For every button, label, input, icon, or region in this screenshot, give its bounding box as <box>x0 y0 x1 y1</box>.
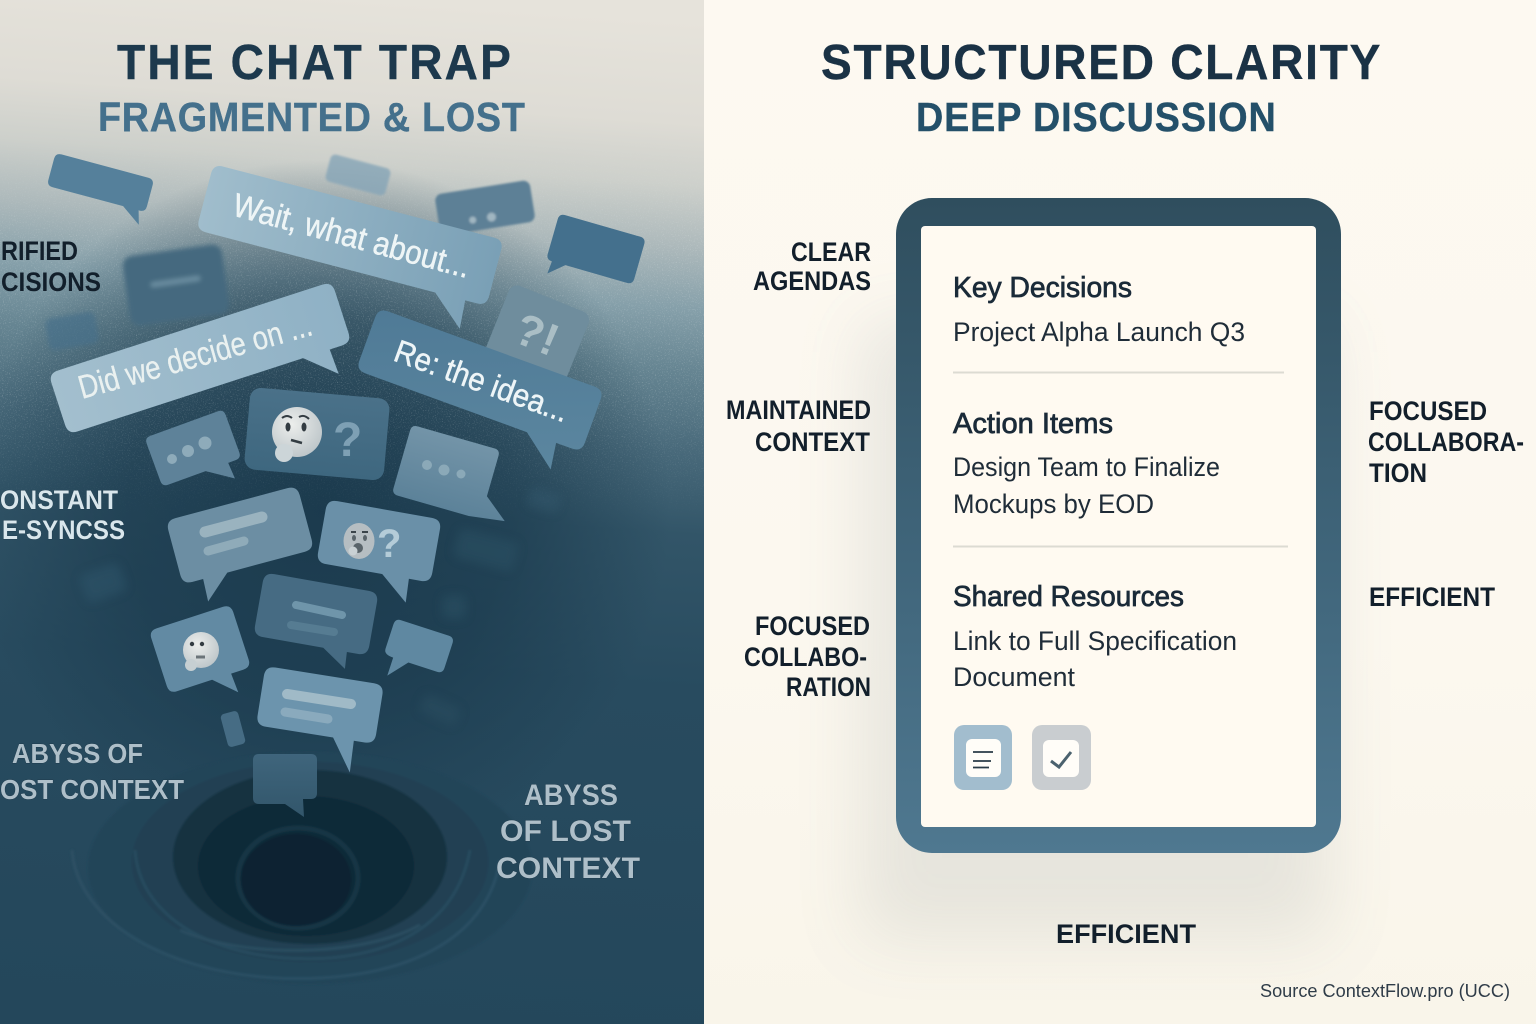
icon: checkmark <box>1032 725 1091 790</box>
section: key decisions <box>953 272 1245 347</box>
icon: document <box>954 725 1012 790</box>
section: action items: Design Team to Finalize <box>953 452 1220 482</box>
section: action items: Mockups by EOD <box>953 489 1154 519</box>
label: focused collaboration right: TION <box>1369 458 1427 488</box>
chat bubble: faint left <box>45 311 99 351</box>
icon: thinking face <box>272 407 322 462</box>
icon: worried face <box>183 632 219 671</box>
title: structured clarity: STRUCTURED CLARITY <box>821 36 1380 90</box>
label: focused collaboration left: FOCUSED <box>755 611 870 641</box>
title: the chat trap: THE CHAT TRAP <box>117 36 511 90</box>
section: action items <box>953 408 1220 519</box>
chat bubble: sinking into abyss <box>253 754 317 817</box>
chat bubble: typing dots right <box>392 425 523 526</box>
chat bubble: dark text lines <box>250 572 379 672</box>
label: abyss of lost context right <box>496 779 640 885</box>
illustration: abyss vortex <box>72 752 532 984</box>
subtitle: deep discussion: DEEP DISCUSSION <box>916 95 1276 140</box>
chat bubble: did we decide on: Did we decide on ... <box>74 306 316 406</box>
chat bubble: small right <box>378 618 454 692</box>
label: clear agendas <box>753 237 871 296</box>
icon: shocked face <box>344 523 374 559</box>
label: maintained context <box>726 395 871 457</box>
chat bubble: top right dots <box>434 180 536 236</box>
chat bubble: top small faded <box>324 153 392 197</box>
label: abyss of lost context right: ABYSS <box>524 779 618 812</box>
label: focused collaboration left: RATION <box>786 672 871 702</box>
chat bubble: shocked emoji <box>312 499 442 606</box>
chat bubble: wait, what about: Wait, what about... <box>229 186 474 285</box>
label: abyss of lost context right: OF LOST <box>500 815 631 848</box>
label: abyss of lost context left: ABYSS OF <box>12 738 143 769</box>
tablet document card <box>896 198 1341 853</box>
chat bubble: text lines bottom <box>251 666 384 776</box>
label: clarified decisions <box>1 236 101 297</box>
section: key decisions: Project Alpha Launch Q3 <box>953 317 1245 347</box>
chat bubble: blurred dark <box>122 243 230 327</box>
subtitle: fragmented and lost: FRAGMENTED & LOST <box>98 95 525 140</box>
chat bubble: question and exclamation: ?! <box>508 303 566 366</box>
panel: the chat trap background <box>0 0 704 1024</box>
label: clear agendas: AGENDAS <box>753 266 871 296</box>
label: focused collaboration left: COLLABO- <box>744 642 867 672</box>
section: shared resources: Shared Resources <box>953 581 1184 613</box>
title: structured clarity <box>821 36 1380 140</box>
label: constant re-syncs: E-SYNCSS <box>2 515 125 545</box>
label: abyss of lost context left: OST CONTEXT <box>0 774 184 805</box>
source note: Source ContextFlow.pro (UCC) <box>1260 981 1510 1001</box>
label: constant re-syncs <box>0 485 125 545</box>
chat bubble: re the idea: Re: the idea... <box>390 333 574 429</box>
chat bubble: text lines left <box>166 486 320 607</box>
section: action items: Action Items <box>953 408 1113 440</box>
panel: structured clarity background <box>704 0 1536 1024</box>
chat bubble: question and exclamation <box>482 283 592 389</box>
chat bubble: small sliver <box>220 710 246 748</box>
label: clarified decisions: CISIONS <box>1 267 101 297</box>
label: constant re-syncs: ONSTANT <box>0 485 118 515</box>
label: abyss of lost context left <box>0 738 184 805</box>
label: efficient right: EFFICIENT <box>1369 582 1495 612</box>
label: abyss of lost context right: CONTEXT <box>496 852 640 885</box>
label: efficient bottom: EFFICIENT <box>1056 919 1197 949</box>
label: focused collaboration left <box>744 611 871 702</box>
chat bubble: top left dark <box>43 153 154 226</box>
label: focused collaboration right <box>1368 396 1524 488</box>
label: clarified decisions: RIFIED <box>1 236 78 266</box>
section: shared resources: Link to Full Specification <box>953 626 1237 656</box>
section: key decisions: Key Decisions <box>953 272 1132 304</box>
chat bubble: wait, what about <box>189 164 504 334</box>
chat bubble: thinking emoji <box>244 387 390 481</box>
section: shared resources: Document <box>953 662 1075 692</box>
section: shared resources <box>953 581 1237 692</box>
label: focused collaboration right: FOCUSED <box>1369 396 1487 426</box>
label: maintained context: CONTEXT <box>755 427 870 457</box>
chat bubble: did we decide on <box>48 282 360 459</box>
decorative faded bubbles <box>78 486 562 728</box>
title: the chat trap <box>98 36 525 140</box>
chat bubble: top right dark <box>543 214 646 297</box>
chat bubble: typing dots left <box>145 409 247 503</box>
label: maintained context: MAINTAINED <box>726 395 871 425</box>
label: clear agendas: CLEAR <box>791 237 871 267</box>
chat bubble: re the idea <box>347 308 604 477</box>
chat bubble: thinking emoji: ? <box>333 414 362 467</box>
chat bubble: worried emoji <box>149 604 257 713</box>
chat bubble: shocked emoji: ? <box>377 522 401 566</box>
